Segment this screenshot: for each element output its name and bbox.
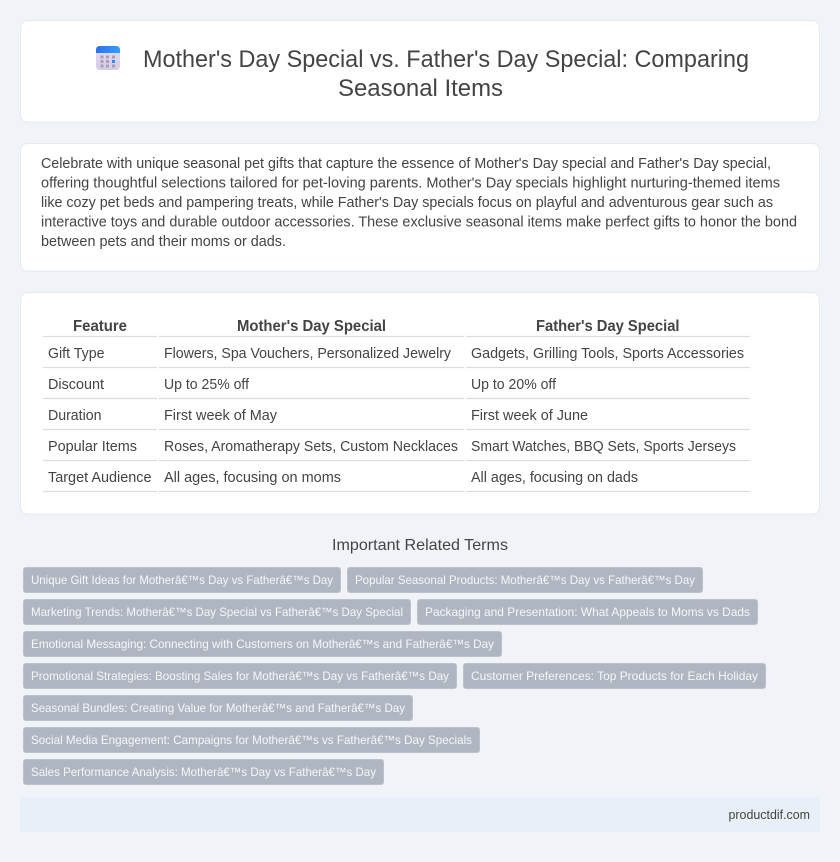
- header panel: [20, 20, 820, 122]
- tag: Popular Seasonal Products: Motherâ€™s Day vs Fatherâ€™s Day: [355, 573, 695, 587]
- table header: [73, 318, 680, 335]
- icon: calendar: [96, 46, 120, 70]
- table row: gift type: Flowers, Spa Vouchers, Personalized Jewelry: [164, 346, 452, 362]
- table header: Father's Day Special: [536, 318, 680, 335]
- table panel: [20, 292, 820, 514]
- tag: Social Media Engagement: Campaigns for Motherâ€™s vs Fatherâ€™s Day Specials: [31, 733, 472, 747]
- table row: discount: Up to 20% off: [471, 377, 557, 393]
- table row: target audience: Target Audience: [48, 470, 152, 486]
- table row: target audience: All ages, focusing on moms: [164, 470, 341, 486]
- tag: Seasonal Bundles: Creating Value for Motherâ€™s and Fatherâ€™s Day: [31, 701, 405, 715]
- tag: Marketing Trends: Motherâ€™s Day Special vs Fatherâ€™s Day Special: [31, 605, 403, 619]
- tag: Promotional Strategies: Boosting Sales for Motherâ€™s Day vs Fatherâ€™s Day: [31, 669, 449, 683]
- tag: Customer Preferences: Top Products for Each Holiday: [471, 669, 758, 683]
- title: Mother's Day Special vs. Father's Day Special: Comparing: [143, 46, 749, 73]
- related terms tags: [24, 568, 766, 784]
- table row: duration: Duration: [48, 408, 102, 424]
- table row: gift type: Gadgets, Grilling Tools, Sports Accessories: [471, 346, 744, 362]
- tag: [418, 600, 758, 624]
- tag: [348, 568, 702, 592]
- table row: target audience: All ages, focusing on dads: [471, 470, 638, 486]
- intro text: offering thoughtful selections tailored for pet-loving parents. Mother's Day specials highlight nurturing-themed items: [41, 176, 780, 192]
- intro text: interactive toys and durable outdoor accessories. These exclusive seasonal items make perfect gifts to honor the bond: [41, 214, 797, 230]
- related terms heading: Important Related Terms: [332, 537, 508, 554]
- tag: [24, 760, 384, 784]
- table header: Mother's Day Special: [237, 318, 386, 335]
- table row: duration: First week of June: [471, 408, 588, 424]
- table row: duration: First week of May: [164, 408, 278, 424]
- table row: discount: [48, 377, 557, 393]
- table row: gift type: [48, 346, 744, 362]
- intro text: between pets and their moms or dads.: [41, 234, 286, 250]
- tag: Emotional Messaging: Connecting with Customers on Motherâ€™s and Fatherâ€™s Day: [31, 637, 494, 651]
- tag: Sales Performance Analysis: Motherâ€™s Day vs Fatherâ€™s Day: [31, 765, 376, 779]
- footer: [20, 798, 820, 832]
- title: Seasonal Items: [338, 75, 503, 102]
- table row: popular items: Popular Items: [48, 439, 137, 455]
- table row: popular items: [48, 439, 736, 455]
- footer: productdif.com: [728, 807, 810, 822]
- tag: [24, 632, 502, 656]
- table row: duration: [48, 408, 588, 424]
- table row: popular items: Roses, Aromatherapy Sets, Custom Necklaces: [164, 439, 458, 455]
- table row: gift type: Gift Type: [48, 346, 104, 362]
- intro panel: [20, 144, 820, 271]
- tag: Unique Gift Ideas for Motherâ€™s Day vs Fatherâ€™s Day: [31, 573, 333, 587]
- intro text: Celebrate with unique seasonal pet gifts that capture the essence of Mother's Day special and Father's Day special,: [41, 156, 771, 172]
- tag: [24, 728, 480, 752]
- table header: Feature: [73, 318, 127, 335]
- tag: [24, 664, 456, 688]
- tag: [24, 600, 410, 624]
- table row: discount: Up to 25% off: [164, 377, 250, 393]
- tag: [24, 696, 412, 720]
- table row: target audience: [48, 470, 638, 486]
- tag: [24, 568, 340, 592]
- table row: discount: Discount: [48, 377, 104, 393]
- intro text: like cozy pet beds and pampering treats, while Father's Day specials focus on playful and adventurous gear such as: [41, 195, 773, 211]
- tag: Packaging and Presentation: What Appeals to Moms vs Dads: [425, 605, 750, 619]
- table row: popular items: Smart Watches, BBQ Sets, Sports Jerseys: [471, 439, 736, 455]
- tag: [464, 664, 766, 688]
